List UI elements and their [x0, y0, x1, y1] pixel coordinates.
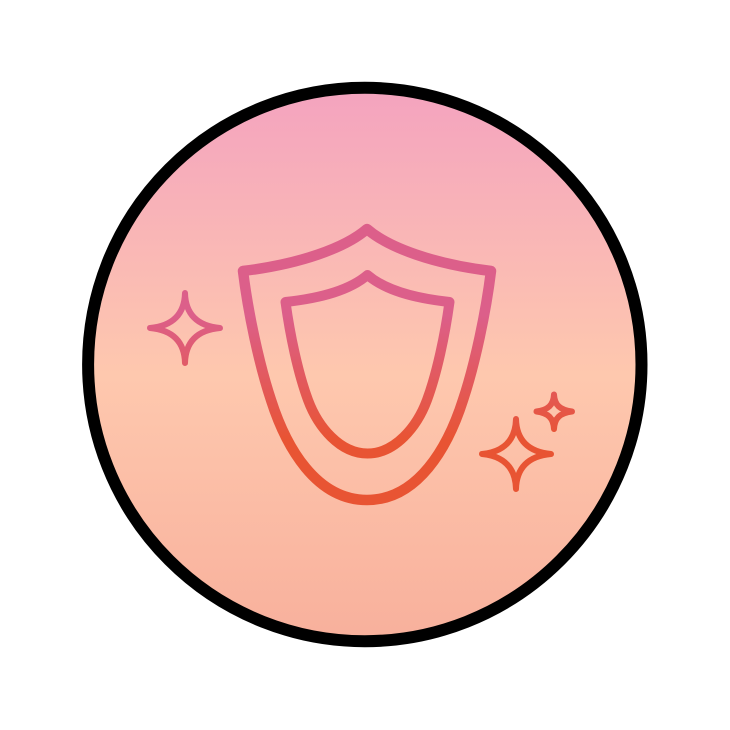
icon: outer shield: [243, 229, 491, 500]
icon: large right sparkle: [482, 419, 551, 489]
icon: inner shield: [286, 275, 450, 454]
icon: left sparkle: [150, 293, 220, 363]
circle background: [88, 88, 642, 641]
icon: small right sparkle: [536, 394, 572, 429]
